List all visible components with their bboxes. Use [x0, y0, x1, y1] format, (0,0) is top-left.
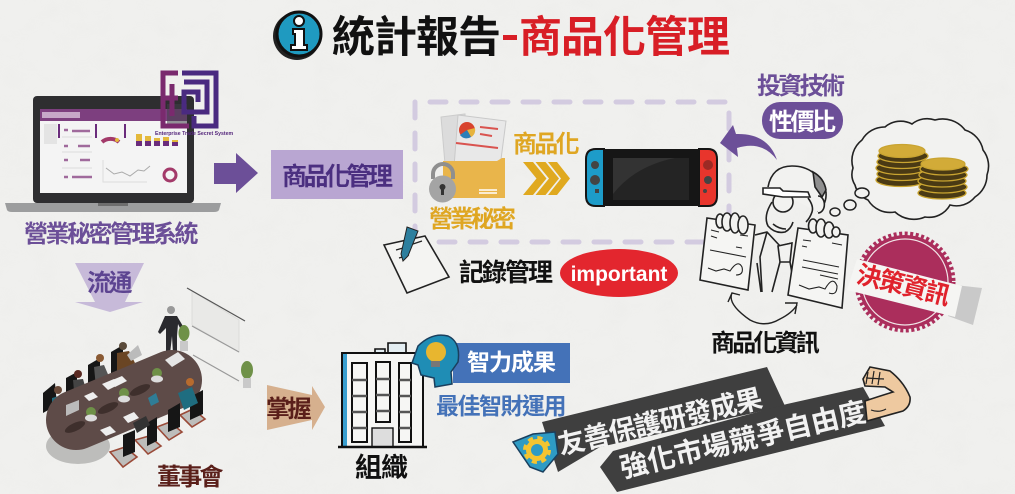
icon: note and pen	[384, 227, 449, 293]
arrow: feedback to product	[720, 125, 777, 160]
logo: ETS	[155, 73, 234, 137]
coin stack right	[918, 158, 968, 199]
arrow: communicate: 流通	[87, 270, 132, 297]
illustration: businessman	[700, 166, 848, 324]
title text black: 統計報告	[332, 14, 500, 62]
investment technology label: 投資技術	[757, 73, 845, 100]
dashed frame: commercialization	[415, 102, 729, 242]
presenter	[158, 306, 190, 354]
chair floor mats	[110, 409, 205, 467]
system label: 營業秘密管理系統	[24, 220, 198, 248]
illustration: board meeting	[43, 288, 253, 467]
title dash	[503, 35, 517, 40]
title text red: 商品化管理	[519, 14, 729, 62]
left hand	[716, 213, 748, 234]
ribbon	[847, 259, 962, 317]
laptop	[5, 96, 221, 212]
icon: chevrons	[523, 162, 570, 195]
record management label: 記錄管理	[459, 259, 553, 287]
icon: flexed arm	[863, 367, 910, 421]
icon: head with bulb	[412, 335, 459, 387]
panel: commercial management	[271, 150, 403, 199]
panel: commercial management: 商品化管理	[282, 163, 393, 191]
coin stack left	[876, 144, 928, 186]
icon: building	[338, 343, 427, 447]
arrow: to commercial management	[214, 153, 258, 193]
panel: management system laptop	[5, 73, 234, 248]
arrow: communicate	[75, 263, 144, 312]
back chairs	[43, 345, 123, 413]
floor shadow	[46, 428, 110, 464]
commercial information label: 商品化資訊	[711, 330, 820, 357]
panel: intellectual achievement	[412, 335, 570, 387]
board label: 董事會	[157, 464, 223, 491]
decision information label: 決策資訊	[854, 261, 953, 311]
banner: protect R&D results	[542, 367, 785, 472]
badge: important	[560, 249, 678, 297]
trade secret label: 營業秘密	[429, 205, 516, 233]
back seated people	[52, 342, 135, 416]
icon: trade secret folder	[429, 114, 506, 202]
organization label: 組織	[355, 453, 408, 483]
badge: value for money: 性價比	[769, 109, 836, 136]
logo: ETS: Enterprise Trade Secret System	[155, 131, 234, 137]
commercialize label: 商品化	[513, 131, 580, 158]
best IP use label: 最佳智財運用	[436, 393, 565, 419]
projection screen	[192, 291, 239, 352]
arrow: grasp: 掌握	[266, 396, 311, 423]
floor plant	[241, 361, 253, 388]
icon: info	[273, 12, 321, 60]
arrow: grasp	[266, 385, 325, 430]
banner: protect R&D results: 友善保護研發成果	[555, 383, 765, 461]
title	[273, 12, 729, 62]
table items	[63, 345, 185, 436]
icon: shield gear	[513, 432, 558, 472]
badge: important: important	[571, 263, 667, 286]
ribbon tail	[948, 285, 982, 325]
panel: intellectual achievement: 智力成果	[467, 349, 556, 375]
thought bubble: coins	[830, 119, 989, 219]
front chairs with people	[123, 378, 203, 457]
table	[76, 380, 172, 420]
badge: value for money	[762, 102, 843, 139]
banner: strengthen market competition: 強化市場競爭自由度	[617, 396, 869, 484]
icon: game console	[586, 149, 717, 206]
right hand	[808, 219, 840, 238]
seal: decision information	[847, 234, 982, 330]
